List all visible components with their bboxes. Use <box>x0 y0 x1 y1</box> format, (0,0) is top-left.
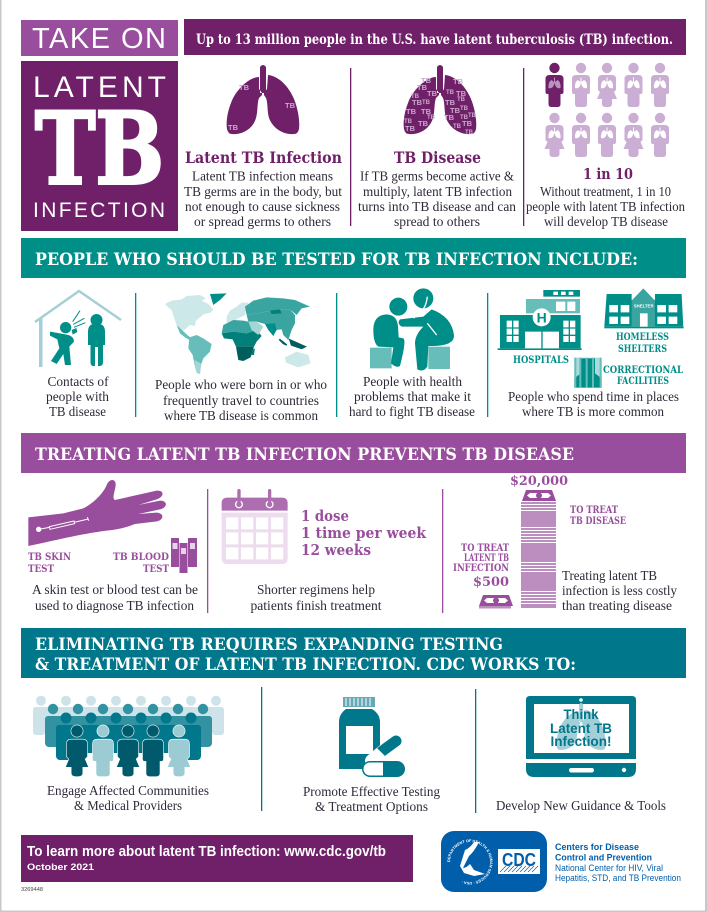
text: born or travel <box>155 378 327 424</box>
footer bar: October 2021 <box>27 862 94 872</box>
text: places: People who spend time in places <box>508 390 679 405</box>
labels: places: CORRECTIONAL <box>603 364 683 376</box>
icon: TB disease lungs: TB <box>404 119 413 125</box>
panel: 1 in 10 text: 1 in 10 <box>583 165 633 183</box>
text: shorter regimens <box>250 583 382 614</box>
icon: laptop with message: Think <box>564 706 599 722</box>
CDC logo: DEPARTMENT OF HEALTH & HUMAN SERVICES · USA · <box>447 839 493 885</box>
icon: TB disease lungs <box>404 65 477 136</box>
footer bar: To learn more about latent TB infection: www.cdc.gov/tb <box>27 844 386 860</box>
title: latent TB infection block <box>21 61 178 231</box>
labels: places <box>513 331 683 387</box>
icon: hospital <box>498 290 582 350</box>
panel: TB disease text: If TB germs become active & <box>360 170 514 184</box>
text: dose schedule: 1 time per week <box>301 524 427 542</box>
labels: skin and blood test: TB BLOOD <box>113 552 169 563</box>
heading band: eliminating TB <box>21 628 686 678</box>
chart: world map <box>165 293 311 374</box>
text: health problems <box>349 375 475 420</box>
labels: skin and blood test <box>28 552 169 575</box>
text: develop guidance: Develop New Guidance & Tools <box>496 799 666 814</box>
icon: TB disease lungs: TB <box>468 113 477 119</box>
icon: TB disease lungs: TB <box>462 119 473 128</box>
icon: calendar <box>222 491 288 564</box>
labels: treatment costs: INFECTION <box>453 563 509 574</box>
text: places <box>508 390 679 420</box>
text: diagnose: used to diagnose TB infection <box>35 599 194 614</box>
panel: 1 in 10 text: Without treatment, 1 in 10 <box>540 185 671 200</box>
labels: treatment costs: TB DISEASE <box>570 516 626 527</box>
icon: TB disease lungs: TB <box>460 115 469 121</box>
text: less costly <box>562 569 677 614</box>
icon: blood tubes <box>171 538 197 573</box>
chart: cost comparison money stacks: $500 <box>473 575 509 590</box>
icon: TB disease lungs: TB <box>460 106 469 112</box>
footer bar <box>21 835 413 882</box>
icon: TB disease lungs: TB <box>445 98 456 107</box>
text: contacts: Contacts of <box>48 375 109 390</box>
text: born or travel: where TB disease is common <box>164 409 318 424</box>
labels: places: SHELTERS <box>618 343 667 355</box>
icon: TB disease lungs: TB <box>457 97 466 103</box>
labels: skin and blood test: TB SKIN <box>28 552 71 563</box>
text: shorter regimens: patients finish treatment <box>250 599 382 614</box>
panel: TB disease text: spread to others <box>394 215 480 230</box>
panel: latent TB infection text: not enough to cause sickness <box>185 200 340 215</box>
panel: 1 in 10 text: will develop TB disease <box>544 215 668 230</box>
text: born or travel: People who were born in or who <box>155 378 327 393</box>
icon: TB disease lungs: TB <box>411 94 420 100</box>
heading band: people who should be tested: PEOPLE WHO SHOULD BE TESTED FOR TB INFECTION INCLUDE: <box>35 250 638 270</box>
icon: TB disease lungs: TB <box>444 113 455 122</box>
text: health problems: People with health <box>363 375 462 390</box>
icon: TB disease lungs: TB <box>453 77 464 86</box>
icon: laptop with message: Latent TB <box>550 720 612 736</box>
panel: latent TB infection text: Latent TB Infection <box>185 148 342 167</box>
text: diagnose: A skin test or blood test can be <box>32 583 198 598</box>
labels: places: HOSPITALS <box>513 354 569 366</box>
icon: homeless shelter: SHELTER <box>634 303 654 308</box>
text: CDC center names: Control and Prevention <box>555 852 652 864</box>
icon: doctor and patient <box>370 288 454 371</box>
text: less costly: infection is less costly <box>562 584 677 599</box>
icon: arm with syringe <box>28 480 166 546</box>
panel: TB disease text <box>358 148 516 230</box>
icon: homeless shelter <box>604 288 684 328</box>
text: CDC center names <box>555 842 681 884</box>
panel: latent TB infection text <box>184 148 342 230</box>
panel: 1 in 10 text: people with latent TB infection <box>526 200 685 215</box>
labels: treatment costs: TO TREAT <box>570 505 618 516</box>
text: born or travel: frequently travel to countries <box>163 394 319 409</box>
publication number: 3269448 <box>21 887 43 893</box>
icon: laptop with message: Infection! <box>550 733 612 749</box>
heading band: eliminating TB: & TREATMENT OF LATENT TB INFECTION. CDC WORKS TO: <box>35 655 576 675</box>
title: latent TB infection block: TB <box>35 92 164 208</box>
icon: latent TB lungs: TB <box>285 101 296 110</box>
labels: treatment costs: LATENT TB <box>464 553 509 564</box>
CDC logo <box>441 831 547 892</box>
icon: prisoner behind bars <box>574 358 602 388</box>
title: latent TB infection block: INFECTION <box>33 199 165 222</box>
text: places: where TB is more common <box>522 405 664 420</box>
icon: TB disease lungs: TB <box>422 100 431 106</box>
panel: TB disease text: TB Disease <box>394 148 481 167</box>
icon: hospital: H <box>537 309 547 325</box>
icon: latent TB lungs: TB <box>228 123 239 132</box>
panel: 1 in 10 text <box>526 165 685 230</box>
icon: TB disease lungs: TB <box>418 119 429 128</box>
icon: TB disease lungs: TB <box>427 89 438 98</box>
text: contacts <box>46 375 109 420</box>
text: CDC center names: National Center for HIV, Viral <box>555 863 663 874</box>
text: engage communities: Engage Affected Communities <box>47 784 209 799</box>
icon: crowd of people <box>33 696 224 777</box>
text: promote testing: Promote Effective Testing <box>303 785 440 800</box>
labels: places: HOMELESS <box>616 331 669 343</box>
icon: TB disease lungs: TB <box>450 106 461 115</box>
text: dose schedule <box>301 507 427 559</box>
text: diagnose <box>32 583 198 614</box>
panel: latent TB infection text: TB germs are in the body, but <box>184 185 342 200</box>
icon: TB disease lungs: TB <box>406 107 417 116</box>
icon: latent TB lungs: TB <box>239 83 250 92</box>
text: promote testing: & Treatment Options <box>315 800 428 815</box>
panel: TB disease text: turns into TB disease and can <box>358 200 516 215</box>
icon: TB disease lungs: TB <box>412 98 423 107</box>
text: contacts: TB disease <box>49 405 106 420</box>
icon: TB disease lungs: TB <box>456 89 467 98</box>
text: less costly: Treating latent TB <box>562 569 657 584</box>
icon: pill bottle and capsules <box>339 697 405 777</box>
icon: TB disease lungs: TB <box>465 130 474 136</box>
text: engage communities: & Medical Providers <box>74 799 182 814</box>
text: less costly: than treating disease <box>562 599 672 614</box>
text: health problems: problems that make it <box>354 390 471 405</box>
panel: TB disease text: multiply, latent TB infection <box>363 185 512 200</box>
title: take on: TAKE ON <box>32 23 166 55</box>
text: CDC center names: Centers for Disease <box>555 842 639 853</box>
text: shorter regimens: Shorter regimens help <box>257 583 375 598</box>
header strip <box>184 19 686 55</box>
heading band: treating latent TB <box>21 433 686 473</box>
heading band: eliminating TB: ELIMINATING TB REQUIRES EXPANDING TESTING <box>35 635 503 655</box>
panel: latent TB infection text: or spread germs to others <box>194 215 331 230</box>
icon: ten people pictogram <box>544 63 669 157</box>
heading band: treating latent TB: TREATING LATENT TB INFECTION PREVENTS TB DISEASE <box>35 445 574 465</box>
icon: TB disease lungs: TB <box>421 107 432 116</box>
panel: latent TB infection text: Latent TB infection means <box>192 170 333 184</box>
icon: TB disease lungs: TB <box>421 76 432 85</box>
labels: skin and blood test: TEST <box>143 564 169 575</box>
text: health problems: hard to fight TB disease <box>349 405 475 420</box>
icon: TB disease lungs: TB <box>417 83 428 92</box>
icon: TB disease lungs: TB <box>405 124 416 133</box>
heading band: people who should be tested <box>21 238 686 278</box>
icon: TB disease lungs: TB <box>446 90 455 96</box>
CDC logo: CDC <box>502 850 536 870</box>
text: engage communities <box>47 784 209 814</box>
chart: cost comparison money stacks <box>473 474 568 608</box>
icon: TB disease lungs: TB <box>453 124 462 130</box>
chart: cost comparison money stacks: $20,000 <box>510 474 568 489</box>
text: dose schedule: 12 weeks <box>301 541 371 559</box>
labels: treatment costs: TO TREAT <box>461 543 509 554</box>
text: contacts: people with <box>46 390 109 405</box>
title: latent TB infection block: LATENT <box>33 71 166 104</box>
labels: places: FACILITIES <box>617 375 669 387</box>
text: CDC center names: Hepatitis, STD, and TB Prevention <box>555 873 681 884</box>
text: promote testing <box>303 785 440 815</box>
icon: latent TB lungs <box>227 65 299 134</box>
icon: TB disease lungs: TB <box>427 115 436 121</box>
labels: treatment costs <box>453 505 626 574</box>
labels: skin and blood test: TEST <box>28 564 54 575</box>
text: dose schedule: 1 dose <box>301 507 349 525</box>
icon: laptop with message <box>526 696 636 777</box>
icon: house with coughing person <box>35 291 121 367</box>
